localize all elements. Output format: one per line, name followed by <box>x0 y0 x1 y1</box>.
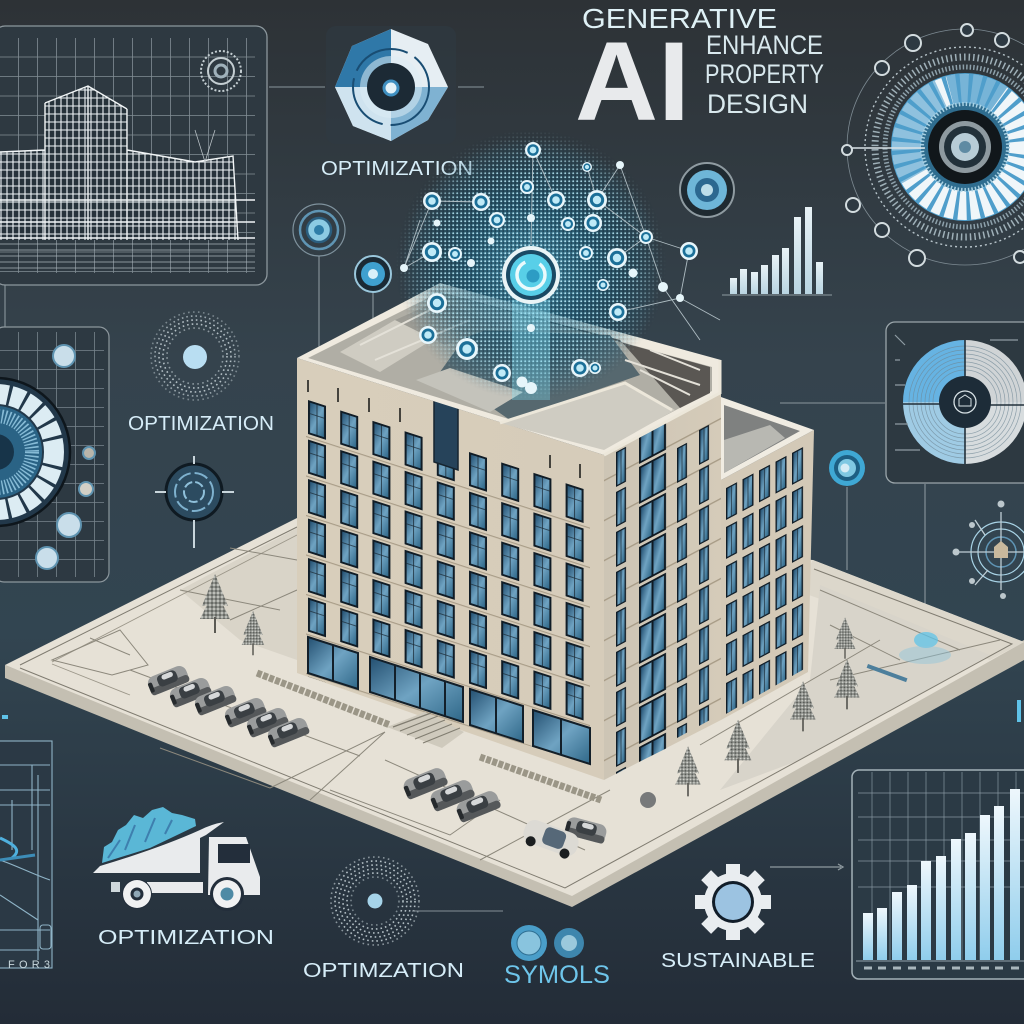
title: AI: AI <box>575 19 690 144</box>
icon: dotted ring <box>331 857 503 945</box>
wall: wing <box>721 430 814 720</box>
label: optimization truck: OPTIMIZATION <box>98 927 274 949</box>
wall: right tower face <box>604 393 721 780</box>
gravel strips <box>257 673 601 800</box>
arrow: gear to chart <box>770 864 843 870</box>
building <box>297 283 814 780</box>
connector lines <box>5 87 925 632</box>
panel: gear diagram <box>0 327 109 582</box>
floor bands right <box>604 393 721 780</box>
icon: symbol pair <box>511 925 584 961</box>
network links <box>404 150 720 340</box>
network nodes <box>400 142 698 394</box>
label: optimzation bottom: OPTIMZATION <box>303 960 464 982</box>
icon: dotted ring drop <box>151 312 239 400</box>
wireframe building drawing <box>0 86 255 268</box>
icon: blue node <box>829 450 865 486</box>
central swirl node <box>502 246 560 304</box>
windows: tower column C <box>677 442 688 738</box>
title block <box>575 3 824 144</box>
panel: growth bar chart <box>852 770 1024 979</box>
panel: pie chart <box>886 322 1024 483</box>
parked cars left row <box>146 664 310 748</box>
label: sustainable: SUSTAINABLE <box>661 950 815 972</box>
ground floor glazing <box>308 637 590 764</box>
icon: gauge dial <box>842 24 1024 266</box>
roof <box>297 283 721 455</box>
label: optimization top: OPTIMIZATION <box>321 158 473 180</box>
subtitle: design: DESIGN <box>707 89 808 119</box>
wall: left face <box>297 358 604 780</box>
icon: dump truck <box>93 807 260 911</box>
data beam <box>512 300 550 400</box>
panel: wireframe building blueprint <box>0 26 267 285</box>
icon: swirl circle <box>293 204 345 256</box>
icon: circular mosaic gear <box>0 378 70 526</box>
subtitle: enhance: ENHANCE <box>706 30 823 60</box>
icons: small seals <box>36 345 95 569</box>
icon: spiral seal <box>201 51 241 91</box>
icon: octagon lens <box>326 26 456 144</box>
label: optimization left: OPTIMIZATION <box>128 413 274 435</box>
icon: circuit gear <box>155 456 234 548</box>
windows: left face <box>306 398 590 765</box>
title: generative: GENERATIVE <box>582 3 777 34</box>
windows: wing <box>724 445 806 715</box>
pie chart <box>903 340 1024 464</box>
small cyan markers <box>2 700 1019 722</box>
AI neural network cluster <box>395 130 720 402</box>
icon: settings gear <box>695 864 771 940</box>
windows: tower column B <box>639 412 667 762</box>
bar chart: top <box>722 207 832 295</box>
icon: eye circle <box>680 163 734 217</box>
dot field <box>395 130 667 402</box>
parking lines and plan sketches <box>52 548 1000 860</box>
wing roof <box>721 397 814 480</box>
bars <box>863 789 1020 960</box>
label: symbols: SYMOLS <box>504 961 610 989</box>
panel: floor plan blueprint <box>0 741 52 971</box>
wall details <box>308 380 580 478</box>
icon: house network <box>952 500 1024 599</box>
tall upper window <box>434 400 458 470</box>
chart grid <box>858 772 1024 960</box>
subtitle: property: PROPERTY <box>705 59 824 89</box>
blueprint caption: FOR3 <box>8 959 50 971</box>
blue splash mark <box>867 632 951 682</box>
icon: target node <box>355 256 391 292</box>
glow halo <box>401 138 661 398</box>
windows: tower column D <box>699 424 710 726</box>
parked cars middle row <box>401 766 502 823</box>
windows: tower column A <box>616 446 627 774</box>
trees <box>200 574 860 808</box>
ground plate <box>5 518 1024 907</box>
parked cars front pair <box>520 816 608 862</box>
steps <box>387 712 464 748</box>
